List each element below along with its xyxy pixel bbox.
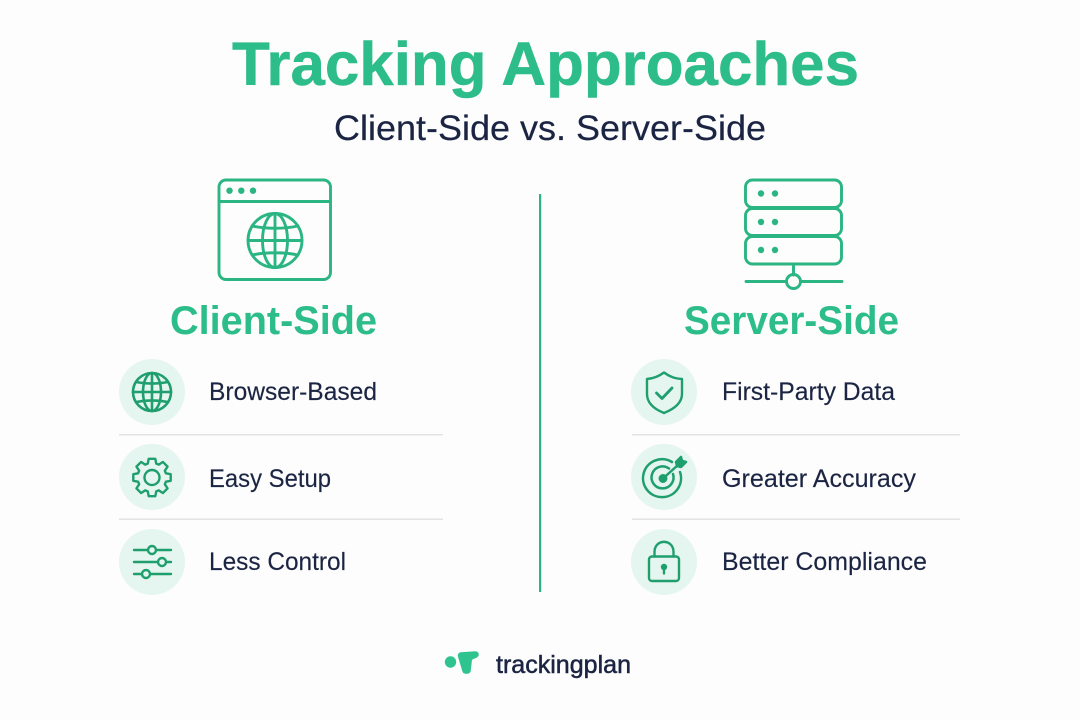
list item: first-party data	[631, 359, 895, 425]
list item: greater accuracy	[631, 444, 916, 510]
divider	[119, 518, 443, 520]
icon: gear	[133, 459, 171, 496]
list item: easy setup	[119, 444, 331, 510]
list item: browser-based	[119, 359, 377, 425]
icon: shield with check	[647, 372, 682, 413]
list item: easy setup: Easy Setup	[209, 465, 331, 493]
icon: sliders	[134, 546, 171, 578]
title: Tracking Approaches	[232, 30, 859, 98]
divider	[632, 518, 960, 520]
icon: target with arrow	[643, 457, 686, 497]
list item: better compliance: Better Compliance	[722, 548, 927, 576]
logo mark	[445, 654, 476, 670]
center divider line	[539, 194, 541, 592]
logo wordmark: trackingplan	[496, 651, 631, 679]
icon: globe	[133, 373, 171, 411]
panel: client-side	[119, 180, 443, 595]
list item: less control: Less Control	[209, 548, 346, 576]
heading: server-side: Server-Side	[684, 299, 899, 343]
list item: less control	[119, 529, 346, 595]
subtitle: Client-Side vs. Server-Side	[334, 109, 766, 148]
heading: client-side: Client-Side	[170, 299, 377, 343]
divider	[632, 434, 960, 436]
list item: better compliance	[631, 529, 927, 595]
panel: server-side	[631, 180, 960, 595]
icon: server stack	[746, 180, 842, 288]
list item: browser-based: Browser-Based	[209, 378, 377, 406]
divider	[119, 434, 443, 436]
list item: first-party data: First-Party Data	[722, 378, 895, 406]
icon: browser window with globe	[219, 180, 330, 280]
icon: padlock	[649, 542, 679, 581]
logo: trackingplan	[445, 651, 631, 679]
list item: greater accuracy: Greater Accuracy	[722, 465, 916, 493]
